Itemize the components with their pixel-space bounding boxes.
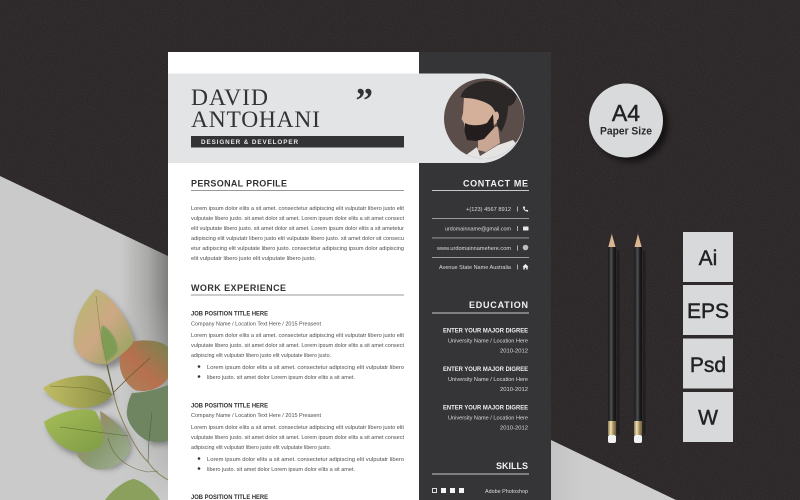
education section <box>432 300 529 432</box>
phone row: +(123) 4567 8912 <box>466 207 511 213</box>
leaf: green centre patch <box>101 325 118 362</box>
skill label: Adobe Photoshop <box>485 489 528 495</box>
role bar <box>191 136 404 148</box>
work experience section <box>191 283 404 500</box>
A4 paper size badge <box>589 84 668 162</box>
leaf: orange right <box>120 340 168 391</box>
leaf: large top <box>74 289 134 364</box>
face <box>462 98 497 128</box>
format tile: Ai: Ai <box>699 247 717 270</box>
education entry 1: ENTER YOUR MAJOR DIGREE <box>443 328 528 334</box>
job entry 2: libero justo. sit amet dolor Lorem ipsum dolor elits a sit amet. <box>207 467 355 473</box>
job entry 2: Company Name / Location Text Here / 2015 Preasent <box>191 413 321 419</box>
job entry 2: adipiscing elit vulputatr libero justo elit vulputate libero justo. <box>191 445 331 451</box>
heading: EDUCATION <box>469 300 528 310</box>
education entry 2: ENTER YOUR MAJOR DIGREE <box>443 366 528 373</box>
format tile: EPS: EPS <box>687 300 729 323</box>
profile text <box>191 206 404 262</box>
job entry 2: JOB POSITION TITLE HERE <box>191 402 268 410</box>
leaf shadows <box>46 293 171 469</box>
pencil 1 <box>608 230 620 443</box>
heading: PERSONAL PROFILE <box>191 178 287 188</box>
resume paper <box>168 52 551 500</box>
education entry 2: University Name / Location Here <box>448 377 528 383</box>
contact section <box>432 178 529 271</box>
leaf: back muted <box>77 411 130 470</box>
education entry 2 <box>443 366 528 393</box>
shirt <box>466 140 516 158</box>
skills section <box>432 461 529 495</box>
job entry 1: libero justo. sit amet dolor Lorem ipsum dolor elits a sit amet. <box>207 375 355 381</box>
leaf: dark green right <box>127 385 168 442</box>
job entry 1: Lorem ipsum dolor elits a sit amet. consectetur adipiscing elit vulputatr libero justo elit <box>191 333 404 339</box>
gray diagonal panel right <box>551 440 676 500</box>
profile text: elit vulputate libero justo. sit amet dolor sit amet. Lorem ipsum dolor elits a sit ametetur <box>191 226 404 232</box>
header band <box>168 74 524 163</box>
format tile: Psd <box>683 338 733 388</box>
profile text: vulputate libero justo. sit amet dolor sit amet. Lorem ipsum dolor elits a sit amet consect <box>191 216 404 222</box>
format tile: EPS <box>683 285 733 335</box>
education entry 3 <box>443 404 528 432</box>
ear <box>495 112 499 120</box>
job entry 1: adipiscing elit vulputatr libero justo elit vulputate libero justo. <box>191 353 331 359</box>
A4 paper size badge: A4 <box>612 100 640 126</box>
education entry 1 <box>443 328 528 354</box>
education entry 3: 2010-2012 <box>500 426 528 432</box>
heading: CONTACT ME <box>463 178 528 188</box>
education entry 3: ENTER YOUR MAJOR DIGREE <box>443 404 528 412</box>
format tile: Psd: Psd <box>690 354 726 377</box>
quote mark: ” <box>356 81 373 120</box>
paper white column <box>168 52 419 500</box>
job entry 2: Lorem ipsum dolor elits a sit amet. consectetur adipiscing elit vulputatr libero justo elit <box>191 425 404 431</box>
education entry 1: 2010-2012 <box>500 348 528 354</box>
beard <box>464 114 494 141</box>
job entry 2: Lorem ipsum dolor elits a sit amet. consectetur adipiscing elit vulputatr libero <box>207 457 404 463</box>
leaf: yellow <box>43 376 112 408</box>
format tile: Ai <box>683 232 733 282</box>
job entry 1: vulputate libero justo. sit amet dolor sit amet. Lorem ipsum dolor elits a sit amet consect <box>191 343 404 349</box>
profile text: Lorem ipsum dolor elits a sit amet. consectetur adipiscing elit vulputatr libero justo elit <box>191 206 404 212</box>
job entry 1: Lorem ipsum dolor elits a sit amet. consectetur adipiscing elit vulputatr libero <box>207 365 404 371</box>
pencil 2 <box>634 230 646 443</box>
website row: www.urdomainnamehere.com <box>436 246 511 252</box>
portrait photo <box>444 78 524 160</box>
education entry 1: University Name / Location Here <box>448 338 528 344</box>
stems and veins <box>50 296 168 480</box>
format tile: W: W <box>698 406 718 430</box>
profile text: etur adipiscing elit vulputate libero justo. consectetur adipiscing ipsum dolor adipiscing <box>191 246 404 252</box>
skill rating squares <box>432 488 464 493</box>
heading: SKILLS <box>496 461 528 471</box>
job entry 1: Company Name / Location Text Here / 2015 Preasent <box>191 322 321 328</box>
plant with leaves <box>43 289 171 500</box>
leaf: bright green <box>44 409 103 452</box>
education entry 3: University Name / Location Here <box>448 416 528 422</box>
education entry 2: 2010-2012 <box>500 387 528 393</box>
name <box>191 85 320 133</box>
job entry 1: JOB POSITION TITLE HERE <box>191 310 268 318</box>
heading: WORK EXPERIENCE <box>191 283 286 293</box>
leaf: bottom <box>105 479 160 500</box>
neck <box>478 126 500 152</box>
hair <box>460 81 517 132</box>
job entry 1 <box>191 310 404 381</box>
gray diagonal panel left <box>0 176 168 500</box>
email row: urdomainname@gmail.com <box>445 226 511 232</box>
profile text: adipiscing elit vulputatr libero justo elit vulputate libero justo. sit amet dolor sit consecu <box>191 236 404 242</box>
format tile: W <box>683 392 733 442</box>
job entry 2: vulputate libero justo. sit amet dolor sit amet. Lorem ipsum dolor elits a sit amet consect <box>191 435 404 441</box>
job entry 2 <box>191 402 404 473</box>
A4 paper size badge: Paper Size <box>600 126 652 138</box>
name: ANTOHANI <box>191 107 320 133</box>
personal profile section <box>191 178 404 262</box>
address row: Avenue State Name Australia <box>439 265 512 271</box>
profile text: elit vulputatr libero justo elit vulputate libero justo. <box>191 256 316 262</box>
name: DAVID <box>191 85 268 111</box>
role bar: DESIGNER & DEVELOPER <box>201 139 298 146</box>
paper dark column <box>419 52 551 500</box>
